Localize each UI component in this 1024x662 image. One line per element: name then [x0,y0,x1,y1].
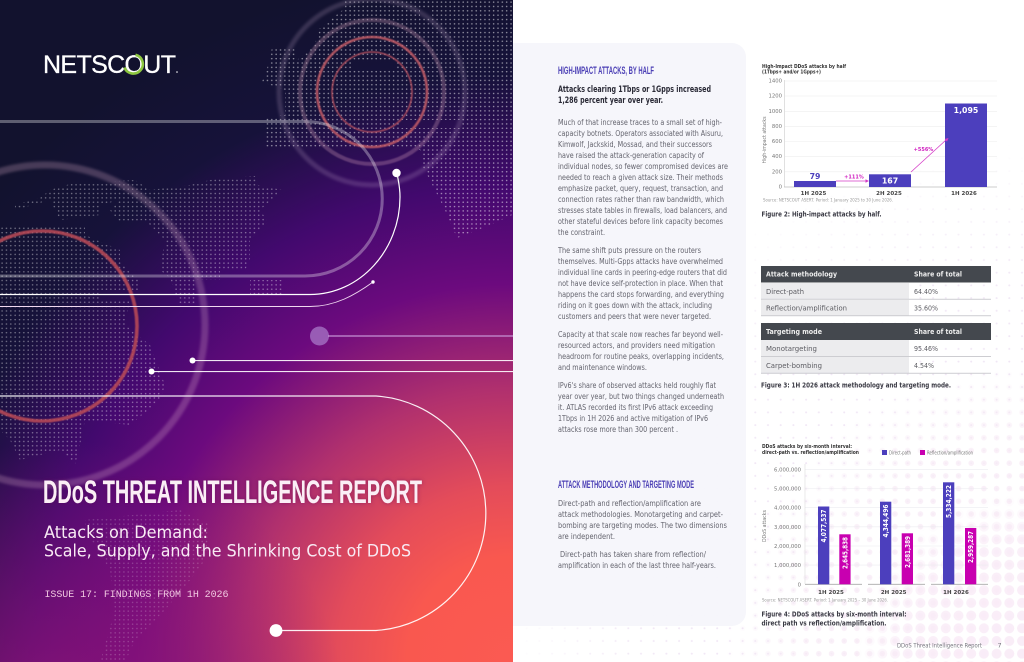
row: direct-path [761,283,991,300]
chart title: High-Impact DDoS attacks by half [762,64,847,70]
subtitle [44,523,411,562]
x axis labels: 1H 2026 [951,191,977,197]
paragraph 3: and maintenance windows. [558,362,647,372]
paragraph 2: happens the card stops forwarding, and everything [558,289,724,299]
panel: article text [513,43,746,626]
bar values [810,106,978,186]
connector line: large arc with dot [0,396,486,637]
bars [794,104,987,187]
paragraph 1: Kimwolf, Jackskid, Mossad, and their successors [558,139,712,149]
connector line: white curve with dot [0,169,401,294]
bar values: 79 [810,172,820,181]
row: monotargeting [761,340,991,357]
legend: Reflection/amplification [927,450,973,456]
bars: reflection/amplification [839,528,976,584]
y axis labels: 200 [772,169,783,175]
bar values: 5,334,222 [945,485,953,518]
row: reflection/amplification: 35.60% [914,303,938,312]
bar values: 1,095 [954,106,978,115]
paragraph 1 [558,117,728,237]
header: attack methodology: Attack methodology [766,270,837,279]
connector line: purple node [310,326,513,346]
growth labels: +556% [914,147,933,153]
chart title: (1Tbps+ and/or 1Gpps+) [762,70,821,76]
paragraph 1: stresses state tables in firewalls, load balancers, and [558,205,727,215]
chart title: direct-path vs. reflection/amplification [762,450,859,456]
y axis labels: 0 [779,184,783,190]
paragraph 2: individual line cards in peering-edge routers that did [558,267,727,277]
paragraph 2: The same shift puts pressure on the routers [557,245,701,255]
bar values: 2,959,287 [967,531,975,563]
y axis labels [774,467,802,588]
y axis title: High-impact attacks [762,116,768,164]
growth arrows [836,138,948,183]
y axis labels: 6,000,000 [774,467,802,473]
row: direct-path: 64.40% [914,287,938,296]
x axis labels [818,590,969,596]
paragraph 1: connection rates rather than raw bandwidth, which [558,194,724,204]
row: monotargeting: Monotargeting [766,344,817,353]
decorative dot field [564,196,1024,662]
footer: DDoS Threat Intelligence Report [897,642,982,650]
concentric signal rings: left [0,165,205,485]
panel: cover page [0,0,513,662]
paragraph 3: resourced actors, and providers need mitigation [558,340,715,350]
bar values [820,485,975,569]
y axis labels: 5,000,000 [774,486,802,492]
x axis labels: 1H 2026 [943,590,969,596]
y axis labels: 600 [772,139,783,145]
figure caption: direct path vs reflection/amplification. [762,618,886,628]
header: attack methodology [761,266,991,282]
connector line: grey loop [0,122,382,276]
chart title: DDoS attacks by six-month interval: [762,444,852,450]
bars: direct-path [818,482,954,584]
chart title [762,64,847,76]
source note: Source: NETSCOUT ASERT. Period: 1 January 2025 to 30 June 2026. [763,198,893,202]
y axis labels: 1200 [769,94,783,100]
paragraph 1: Much of that increase traces to a small set of high- [558,117,722,127]
x axis labels: 1H 2025 [801,191,826,197]
connector line: white node 1 [190,358,513,364]
paragraph 5 [558,498,727,541]
y axis labels: 0 [798,582,802,588]
row: carpet-bombing: Carpet-bombing [766,361,822,370]
header: attack methodology: Share of total [914,270,962,279]
y axis labels: 3,000,000 [774,525,802,531]
legend [882,450,973,456]
lead text [558,84,711,105]
subtitle: Attacks on Demand: [44,523,208,543]
paragraph 2: riding on it goes down with the attack, including [558,300,712,310]
dotted world map: left [1,176,282,464]
y axis labels: 4,000,000 [774,506,802,512]
y axis labels [769,78,783,190]
paragraph 4: 1Tbps in 1H 2026 and active mitigation of IPv6 [558,413,708,423]
row: monotargeting: 95.46% [914,344,938,353]
paragraph 2: customers and peers that were never targeted. [558,311,711,321]
bar values: 2,645,838 [842,537,850,569]
bar values: 4,344,496 [882,504,890,538]
paragraph 3 [558,329,724,372]
logo: NETSCOUT: NETSCOUT [43,51,176,79]
connector line: white node 2 [148,368,513,374]
y axis labels: 1000 [769,109,783,115]
header: targeting mode: Targeting mode [766,327,822,336]
x axis labels: 2H 2025 [881,590,907,596]
paragraph 2 [557,245,727,321]
row: carpet-bombing [761,357,991,374]
title: DDoS THREAT INTELLIGENCE REPORT [43,474,422,510]
row: reflection/amplification: Reflection/amplification [766,303,847,312]
paragraph 4 [558,380,724,434]
y axis title: DDoS attacks [762,510,768,542]
subtitle: Scale, Supply, and the Shrinking Cost of DDoS [44,542,411,562]
paragraph 4: IPv6's share of observed attacks held roughly flat [558,380,717,390]
figure caption: Figure 2: High-impact attacks by half. [762,210,882,218]
paragraph 4: year over year, but two things changed underneath [558,391,724,401]
bar values: 4,077,537 [820,509,828,542]
paragraph 1: needed to reach a given attack size. Their methods [558,172,723,182]
row: reflection/amplification [761,300,991,316]
chart: DDoS attacks by six-month interval [762,444,988,628]
row: carpet-bombing: 4.54% [914,361,934,370]
x axis labels: 2H 2025 [876,191,902,197]
bar values: 167 [882,176,898,186]
table: attack methodology and targeting mode [761,266,991,390]
paragraph 2: not have device self-protection in place. When that [558,278,724,288]
footer: 7 [998,642,1002,650]
paragraph 1: capacity botnets. Operators associated with Aisuru, [558,128,723,138]
paragraph 6: Direct-path has taken share from reflection/ [560,549,706,559]
paragraph 2: themselves. Multi-Gpps attacks have overwhelmed [558,256,723,266]
y axis labels: 400 [772,154,783,160]
paragraph 5: attack methodologies. Monotargeting and carpet- [558,509,723,519]
heading: attack methodology: ATTACK METHODOLOGY AND TARGETING MODE [558,479,694,491]
paragraph 4: it. ATLAS recorded its first IPv6 attack exceeding [558,402,713,412]
header: targeting mode: Share of total [914,327,962,336]
issue line: ISSUE 17: FINDINGS FROM 1H 2026 [44,590,228,601]
dotted world map: lower [85,510,208,660]
figure caption: Figure 4: DDoS attacks by six-month interval: [762,610,907,618]
lead text: 1,286 percent year over year. [558,95,663,105]
paragraph 5: Direct-path and reflection/amplification are [558,498,701,508]
concentric signal rings: upper right [279,0,465,185]
growth labels: +111% [844,174,864,180]
chart: high-impact attacks by half [762,64,997,218]
y axis labels: 800 [772,124,783,130]
paragraph 1: emphasize packet, query, request, transaction, and [558,183,723,193]
header: targeting mode [761,323,991,340]
heading: high-impact attacks: HIGH-IMPACT ATTACKS, BY HALF [558,65,654,77]
paragraph 6 [558,549,716,570]
paragraph 3: headroom for routine peaks, overlapping incidents, [558,351,724,361]
y axis labels: 2,000,000 [774,544,802,550]
paragraph 5: are independent. [558,531,615,541]
growth labels [844,147,933,180]
figure caption: Figure 3: 1H 2026 attack methodology and targeting mode. [761,381,951,390]
paragraph 1: have raised the attack-generation capacity of [558,150,705,160]
legend: Direct-path [889,450,911,456]
source note: Source: NETSCOUT ASERT. Period: 1 January 2025 – 30 June 2026. [762,598,888,602]
dotted world map: upper right [262,1,512,238]
bar values: 2,681,389 [904,536,912,568]
lead text: Attacks clearing 1Tbps or 1Gpps increased [558,84,711,94]
paragraph 4: attacks rose more than 300 percent . [558,424,678,434]
y axis labels: 1400 [769,78,783,84]
connector line: thin curve with dot [0,280,375,306]
paragraph 1: individual nodes, so fewer compromised devices are [558,161,728,171]
paragraph 1: the constraint. [558,227,605,237]
paragraph 3: Capacity at that scale now reaches far beyond well- [558,329,723,339]
figure caption [762,610,907,628]
chart title [762,444,859,456]
x axis labels [801,191,977,197]
row: direct-path: Direct-path [766,287,804,296]
paragraph 6: amplification in each of the last three half-years. [558,560,716,570]
y axis labels: 1,000,000 [774,563,802,569]
paragraph 5: bombing are targeting modes. The two dimensions [558,520,727,530]
x axis labels: 1H 2025 [818,590,844,596]
paragraph 1: other stateful devices before link capacity becomes [558,216,723,226]
